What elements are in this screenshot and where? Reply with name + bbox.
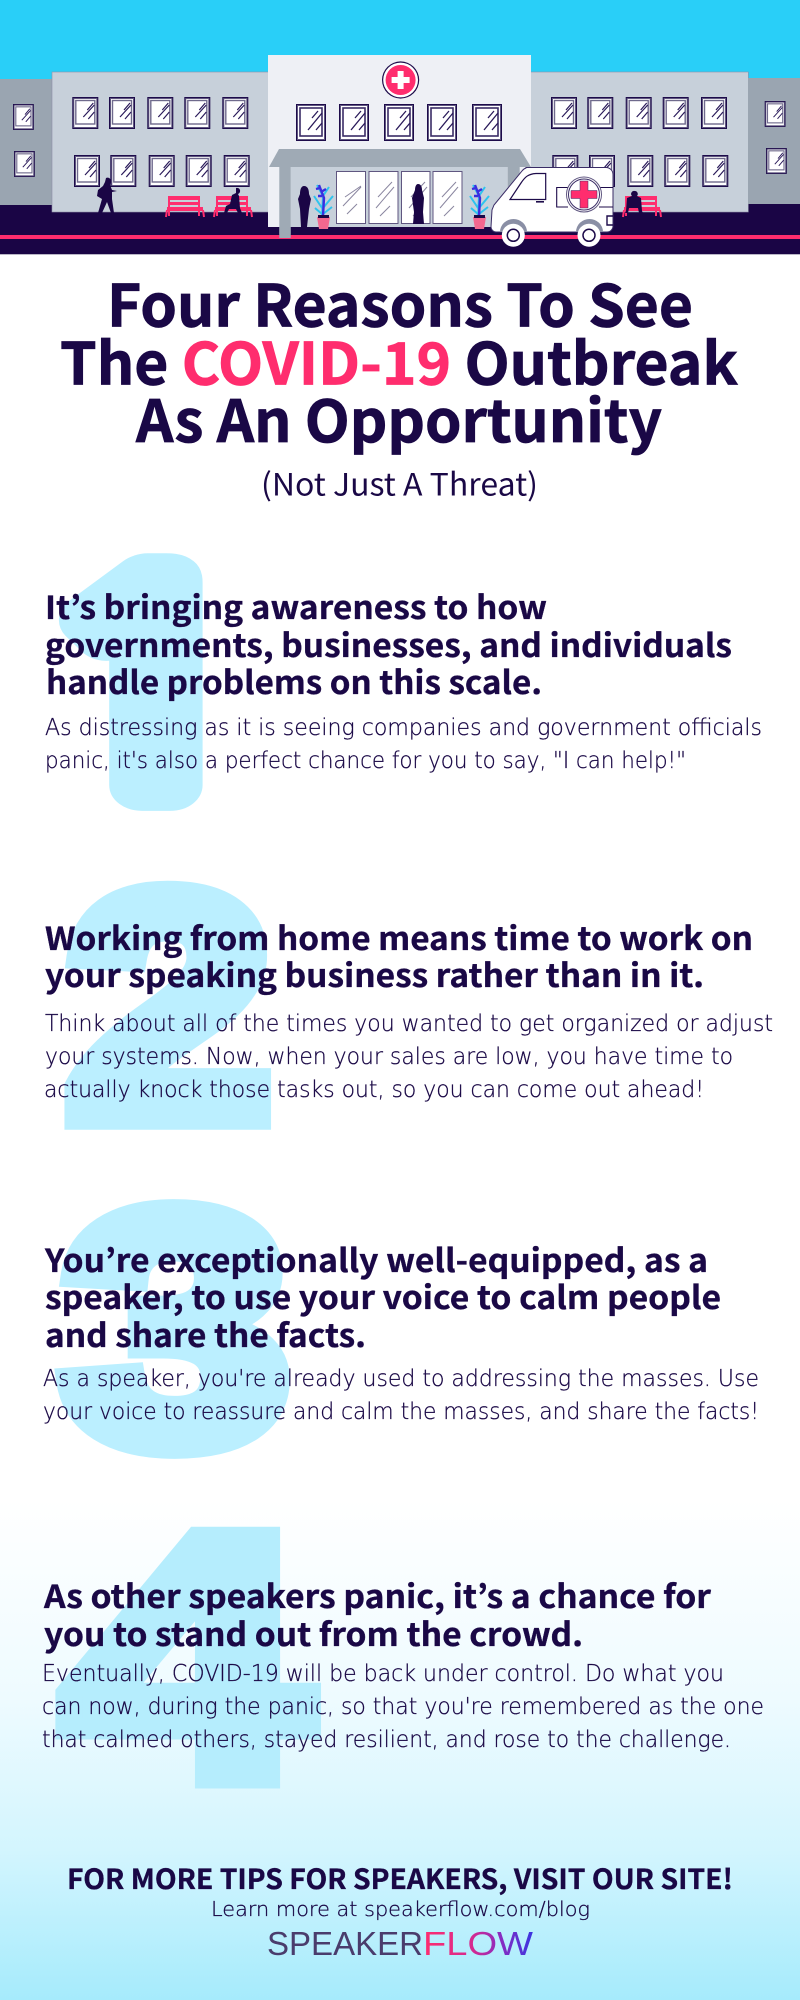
footer call to action: FOR MORE TIPS FOR SPEAKERS, VISIT OUR SITE! [67,1858,733,1898]
title: Four Reasons To See [107,259,693,343]
figure: person at door [412,184,424,224]
building: far left wing [0,79,52,205]
reason 4 heading: As other speakers panic, it’s a chance for [43,1572,711,1618]
reason 3 heading: speaker, to use your voice to calm people [45,1273,721,1319]
footer link line: Learn more at speakerflow.com/blog [211,1897,590,1921]
reason 2 body: actually knock those tasks out, so you can come out ahead! [44,1075,704,1103]
bench [166,196,204,217]
reason 1 body: panic, it's also a perfect chance for you to say, "I can help!" [45,746,686,774]
reason 2 body: your systems. Now, when your sales are low, you have time to [45,1042,733,1070]
icon: potted plant [314,185,333,229]
figure: walking person [97,178,117,213]
reason 3 body: As a speaker, you're already used to addressing the masses. Use [43,1364,759,1392]
logo: SpeakerFlow: FLOW [423,1925,534,1962]
reason 4 body [42,1659,764,1753]
reason 2 body [44,1009,773,1103]
icon: potted plant [470,185,489,229]
road stripe [0,235,800,239]
numeral 2: 2 [66,828,271,1186]
title: As An Opportunity [135,375,662,459]
reason 1 heading [45,583,732,704]
reason 3 body [43,1364,759,1425]
reason 4 body: Eventually, COVID-19 will be back under control. Do what you [42,1659,724,1687]
building: far right wing [748,78,800,204]
figure: standing person [298,186,311,227]
reason 1 heading: handle problems on this scale. [46,658,542,704]
building: right wing [530,72,748,212]
building: central hospital block [268,55,531,227]
ambulance [491,168,613,247]
numeral 3: 3 [63,1145,288,1512]
reason 3 body: your voice to reassure and calm the masses, and share the facts! [43,1397,759,1425]
bench with sitting person [214,188,252,217]
entrance canopy and doors [269,149,531,238]
reason 4 heading: you to stand out from the crowd. [44,1610,583,1656]
numeral 1: 1 [42,553,254,830]
icon: hospital cross badge [382,61,419,99]
reason 3 heading [44,1236,721,1357]
reason 4 heading [43,1572,711,1656]
reason 4 body: can now, during the panic, so that you're remembered as the one [42,1692,764,1720]
numeral 4: 4 [62,1461,313,1852]
title: The COVID-19 Outbreak [60,317,738,401]
reason 1 body [45,713,762,774]
subtitle: (Not Just A Threat) [261,460,538,505]
bench with sitting person [623,191,661,217]
reason 2 heading [45,914,753,997]
reason 1 heading: governments, businesses, and individuals [45,621,732,667]
logo: SpeakerFlow [267,1925,534,1962]
reason 4 body: that calmed others, stayed resilient, and rose to the challenge. [42,1725,731,1753]
title [60,259,738,459]
reason 3 heading: and share the facts. [45,1311,366,1357]
illustration: hospital street scene [0,0,800,255]
reason 2 heading: your speaking business rather than in it. [45,951,704,997]
reason 1 heading: It’s bringing awareness to how [45,583,547,629]
reason 2 heading: Working from home means time to work on [45,914,753,960]
reason 1 body: As distressing as it is seeing companies and government officials [45,713,762,741]
building: left wing [52,72,270,212]
logo: SpeakerFlow: SPEAKER [267,1925,423,1962]
reason 3 heading: You’re exceptionally well-equipped, as a [44,1236,708,1282]
ground and road [0,204,800,255]
